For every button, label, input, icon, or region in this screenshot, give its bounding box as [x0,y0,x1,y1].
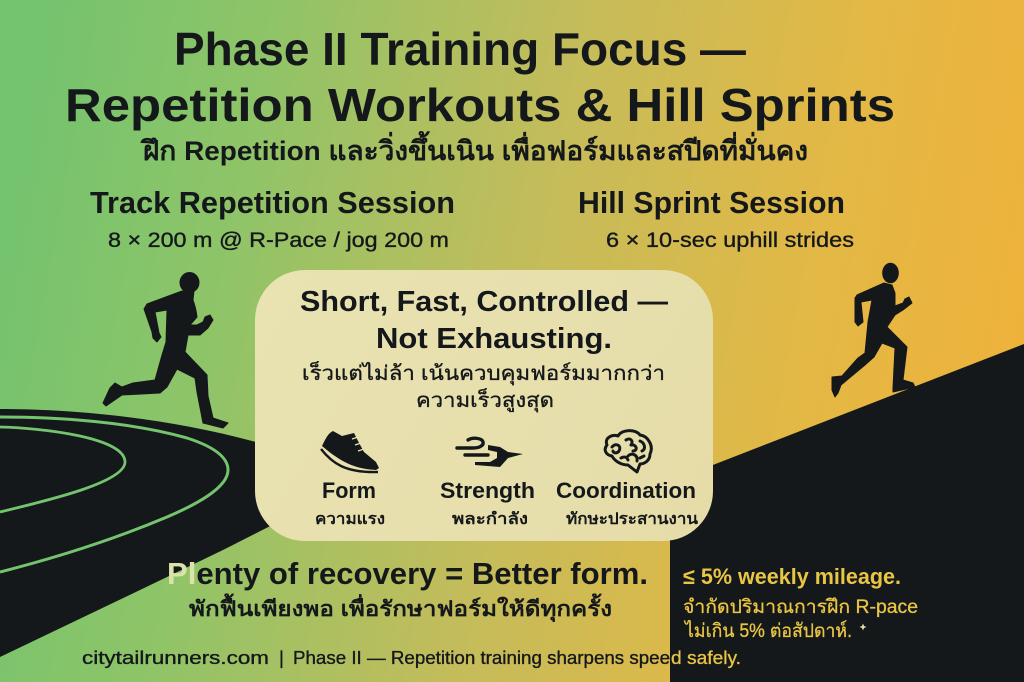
label: form: ความแรง [315,511,385,528]
icon: speed arrow [457,438,523,467]
mileage limit callout: ≤ 5% weekly mileage. [683,564,901,589]
mileage limit callout: ไม่เกิน 5% ต่อสัปดาห์. [683,620,852,642]
recovery message: Plenty of recovery = Better form. [167,556,648,591]
block: hill sprint session: 6 × 10-sec uphill strides [606,229,854,252]
panel Thai message: เร็วแต่ไม่ล้า เน้นควบคุมฟอร์มมากกว่า [302,360,665,386]
block: track repetition session: 8 × 200 m @ R-Pace / jog 200 m [108,229,449,252]
title: Phase II Training Focus — [174,23,746,75]
icon: runner on track silhouette [103,272,228,428]
track surface [0,409,290,657]
title [65,23,895,131]
icon: sparkle [860,624,866,630]
panel Thai message [302,360,665,413]
label: coordination: Coordination [556,478,696,503]
footer: | [279,647,284,668]
label: coordination: ทักษะประสานงาน [566,510,698,528]
block: hill sprint session: Hill Sprint Session [578,185,845,220]
icon: runner on hill silhouette [832,263,915,397]
footer: Phase II — Repetition training sharpens spee [293,647,670,668]
label: strength: พละกำลัง [452,510,528,528]
label: strength [440,478,535,528]
title: Repetition Workouts & Hill Sprints [65,79,895,131]
panel: center message [255,270,713,541]
footer: citytailrunners.com [82,647,269,668]
block: hill sprint session [578,185,854,252]
label: coordination [556,478,698,528]
label: form [315,478,385,528]
icon: shoe [321,431,379,472]
track lane outer line [0,417,228,572]
panel background [255,270,713,541]
recovery message: พักฟื้นเพียงพอ เพื่อรักษาฟอร์มให้ดีทุกครั้ง [189,593,612,623]
mileage limit callout: จำกัดปริมาณการฝึก R-pace [683,597,918,618]
block: track repetition session: Track Repetition Session [90,185,455,220]
label: strength: Strength [440,478,535,503]
footer [82,647,741,668]
block: track repetition session [90,185,455,252]
icon: brain [605,431,651,472]
footer: d safely. [671,647,741,668]
track lane inner line [0,427,125,512]
panel Thai message: ความเร็วสูงสุด [416,387,554,413]
panel heading [300,286,668,355]
panel heading: Short, Fast, Controlled — [300,286,668,318]
recovery message [167,556,648,623]
label: form: Form [322,478,376,503]
panel heading: Not Exhausting. [376,323,612,355]
mileage limit callout [683,564,918,642]
illustration: hill slope [670,344,1024,682]
subtitle Thai: ฝึก Repetition และวิ่งขึ้นเนิน เพื่อฟอร์มและสปีดที่มั่นคง [140,130,808,166]
illustration: running track [0,409,290,657]
